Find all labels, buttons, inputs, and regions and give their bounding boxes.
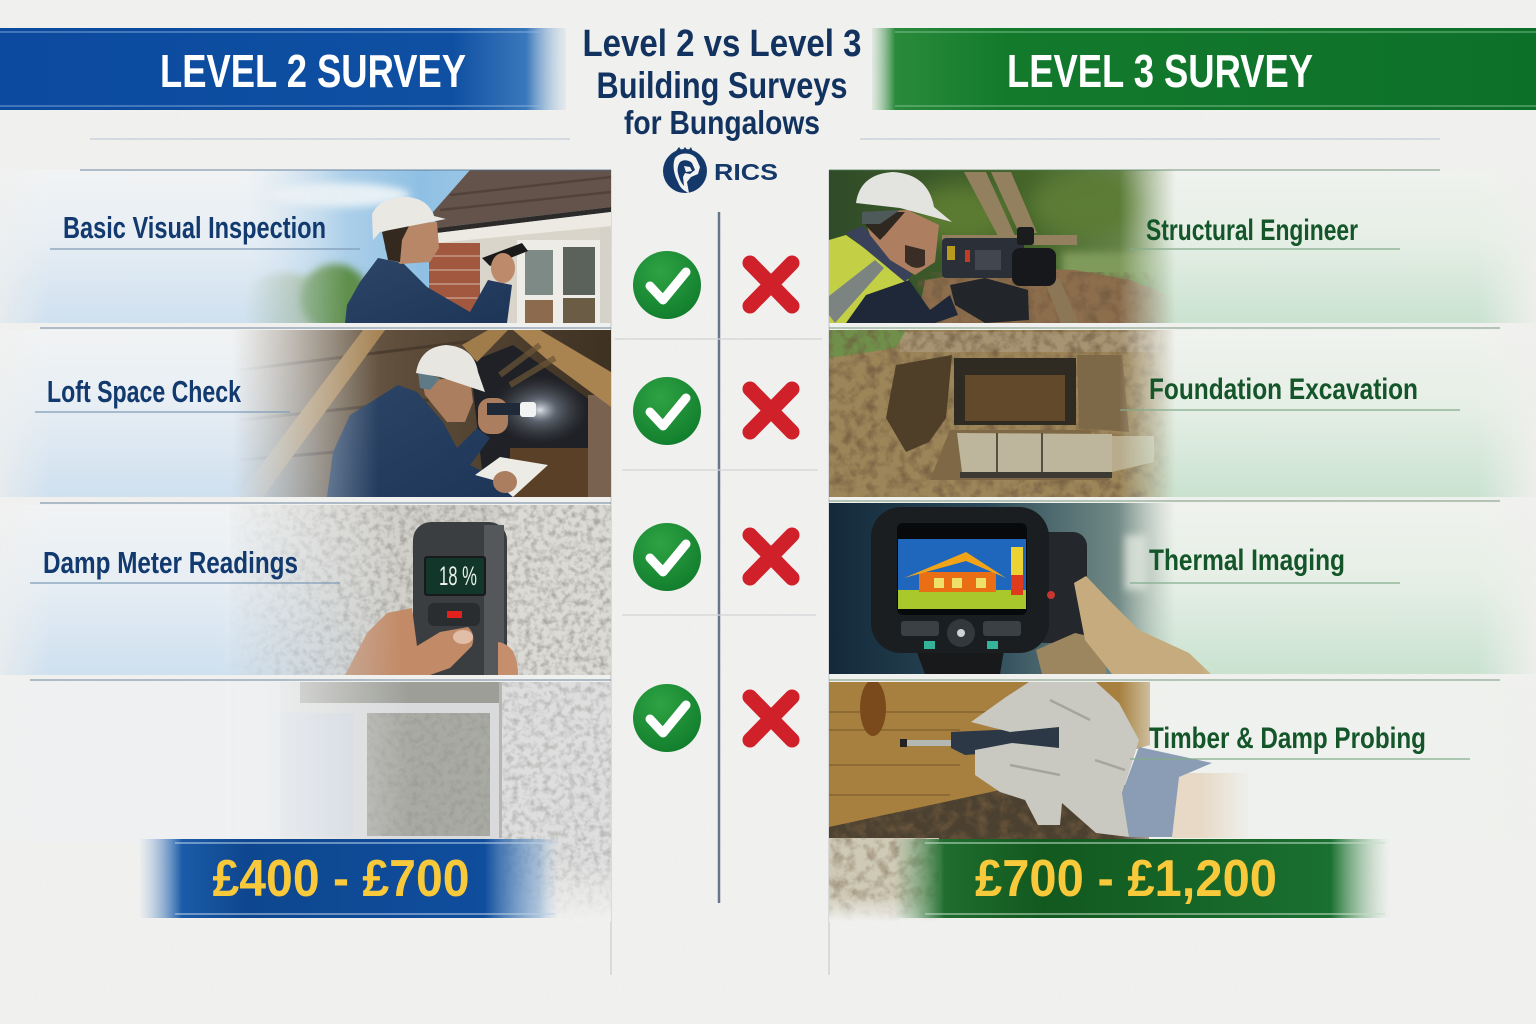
panel: Loft Space Check <box>230 330 611 497</box>
RICS logo <box>663 147 778 193</box>
header: Level 3 Survey: LEVEL 3 SURVEY <box>1007 45 1313 97</box>
gloved hand on thermal camera <box>1074 576 1211 674</box>
header: Level 2 Survey <box>0 28 566 110</box>
icon: damp meter <box>413 522 507 675</box>
label: Timber & Damp Probing: Timber & Damp Probing <box>1149 722 1426 755</box>
panel: Damp Meter Readings <box>239 505 611 675</box>
icon: check row 1 <box>633 251 701 319</box>
panel: Timber & Damp Probing <box>829 680 1150 922</box>
title: Level 2 vs Level 3 <box>582 23 862 65</box>
price: Level 3: £700 - £1,200 <box>975 850 1277 908</box>
price: Level 2: £400 - £700 <box>212 850 470 908</box>
check and cross comparison <box>633 251 792 752</box>
title: for Bungalows <box>624 104 820 141</box>
icon: check row 2 <box>633 377 701 445</box>
title <box>582 23 862 141</box>
icon: damp meter: 18 % <box>439 561 477 591</box>
price: Level 2 <box>140 839 560 918</box>
panel: Basic Visual Inspection <box>253 170 611 323</box>
panel: Thermal Imaging <box>829 503 1179 674</box>
header: Level 2 Survey: LEVEL 2 SURVEY <box>160 45 466 97</box>
worker <box>829 172 958 323</box>
left text fades <box>0 170 392 675</box>
row edge lines left <box>30 170 611 680</box>
price: Level 3 <box>895 839 1390 918</box>
icon: inspection camera <box>942 227 1056 323</box>
icon: cross row 1 <box>750 263 792 306</box>
icon: check row 3 <box>633 523 701 591</box>
icon: cross row 2 <box>750 389 792 432</box>
label: Structural Engineer: Structural Engineer <box>1146 214 1358 247</box>
icon: thermal camera <box>871 507 1087 674</box>
panel: wall with patch <box>280 682 611 922</box>
panel: Structural Engineer <box>829 170 1173 323</box>
icon: check row 4 <box>633 684 701 752</box>
label: Thermal Imaging: Thermal Imaging <box>1149 544 1345 577</box>
comparison divider <box>718 212 720 903</box>
panel: Foundation Excavation <box>829 330 1189 497</box>
label: Loft Space Check: Loft Space Check <box>47 374 242 409</box>
RICS logo: RICS <box>714 159 778 185</box>
header: Level 3 Survey <box>872 28 1536 110</box>
label: Basic Visual Inspection: Basic Visual Inspection <box>63 210 326 245</box>
icon: cross row 4 <box>750 697 792 740</box>
gloved hand with probe <box>900 682 1240 838</box>
row edge lines right <box>829 170 1500 680</box>
right text fades <box>1122 170 1527 839</box>
label: Foundation Excavation: Foundation Excavation <box>1149 373 1418 406</box>
label: Damp Meter Readings: Damp Meter Readings <box>43 545 298 580</box>
icon: cross row 3 <box>750 535 792 578</box>
surveyor <box>327 345 548 497</box>
title: Building Surveys <box>596 65 848 106</box>
surveyor <box>345 197 528 323</box>
